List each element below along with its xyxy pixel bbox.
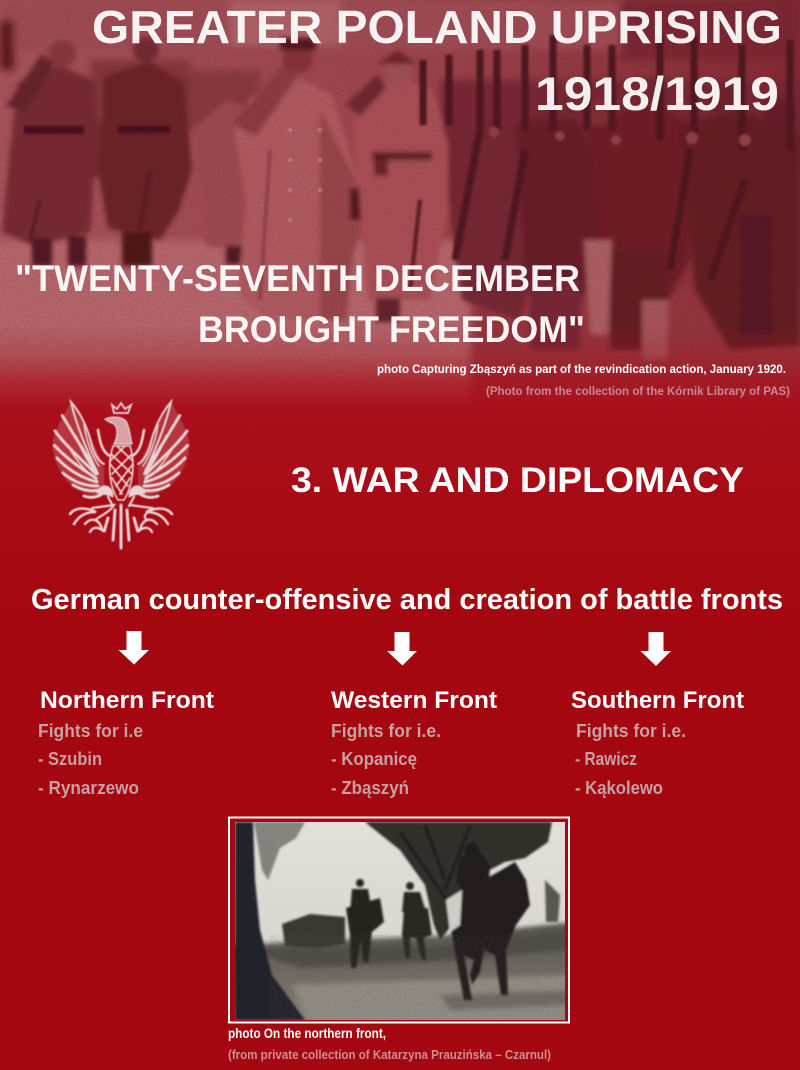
hero photo caption: photo Capturing Zbąszyń as part of the revindication action, January 1920.	[377, 364, 786, 376]
hero photo caption	[377, 364, 790, 398]
panel: northern front	[38, 687, 214, 798]
head	[105, 417, 132, 444]
quote heading: "TWENTY-SEVENTH DECEMBER	[15, 258, 580, 299]
fade into red	[0, 336, 800, 425]
right wing	[132, 402, 189, 497]
talons	[92, 497, 152, 520]
tree foliage, left	[254, 822, 305, 880]
panel: northern front: Northern Front	[40, 687, 214, 714]
rear light soldier	[196, 100, 245, 249]
icon: Polish white eagle emblem	[53, 402, 189, 548]
title	[92, 1, 782, 120]
film grain	[0, 0, 713, 371]
arrow: to southern front	[640, 632, 671, 666]
horse 1	[346, 879, 384, 968]
tree foliage, right	[365, 822, 552, 940]
far cavalry	[282, 914, 345, 948]
subheading: German counter-offensive and creation of battle fronts	[31, 584, 783, 616]
horse 2	[402, 882, 432, 960]
title: 1918/1919	[535, 67, 779, 120]
left soldier 1	[2, 66, 108, 246]
hero photo caption: (Photo from the collection of the Kórnik Library of PAS)	[486, 386, 790, 398]
hands holding rifles	[489, 127, 751, 146]
panel: southern front: Southern Front	[571, 687, 744, 714]
panel: western front: - Zbąszyń	[331, 777, 409, 798]
photo: cavalry on the northern front	[225, 818, 575, 1035]
main officer	[234, 76, 364, 322]
body with scales	[110, 446, 133, 500]
panel: western front: Western Front	[331, 687, 497, 714]
title: GREATER POLAND UPRISING	[92, 1, 782, 53]
arrow: to northern front	[118, 631, 149, 664]
left wing	[53, 402, 110, 497]
photo grain	[270, 935, 565, 1020]
panel: southern front: - Kąkolewo	[575, 777, 663, 798]
crown	[112, 403, 131, 413]
lower photo caption: photo On the northern front,	[228, 1025, 386, 1041]
panel: western front: - Kopanicę	[331, 748, 417, 769]
panel: northern front: - Szubin	[38, 748, 102, 769]
lower photo caption: (from private collection of Katarzyna Prauzińska – Czarnul)	[228, 1048, 551, 1062]
horse 3 and lead rider	[446, 843, 530, 1000]
hero photo: soldiers saluting	[0, 0, 800, 440]
coat details	[288, 128, 322, 222]
panel: western front	[331, 687, 497, 798]
arrow: to western front	[387, 632, 417, 666]
rifles	[423, 35, 790, 280]
panel: northern front: Fights for i.e	[38, 720, 143, 741]
tail	[104, 505, 138, 548]
left soldier 2	[98, 62, 192, 240]
panel: western front: Fights for i.e.	[331, 720, 441, 741]
panel: southern front	[571, 687, 744, 798]
tree trunk	[235, 822, 305, 1020]
second officer	[356, 82, 451, 300]
lower photo caption	[228, 1025, 551, 1062]
panel: southern front: Fights for i.e.	[576, 720, 686, 741]
rank of soldiers, right	[446, 149, 529, 320]
quote heading: BROUGHT FREEDOM"	[198, 309, 585, 350]
section heading: 3. WAR AND DIPLOMACY	[291, 461, 744, 500]
thighs	[97, 486, 113, 497]
quote heading	[15, 258, 585, 350]
panel: northern front: - Rynarzewo	[38, 777, 139, 798]
panel: southern front: - Rawicz	[575, 748, 637, 769]
